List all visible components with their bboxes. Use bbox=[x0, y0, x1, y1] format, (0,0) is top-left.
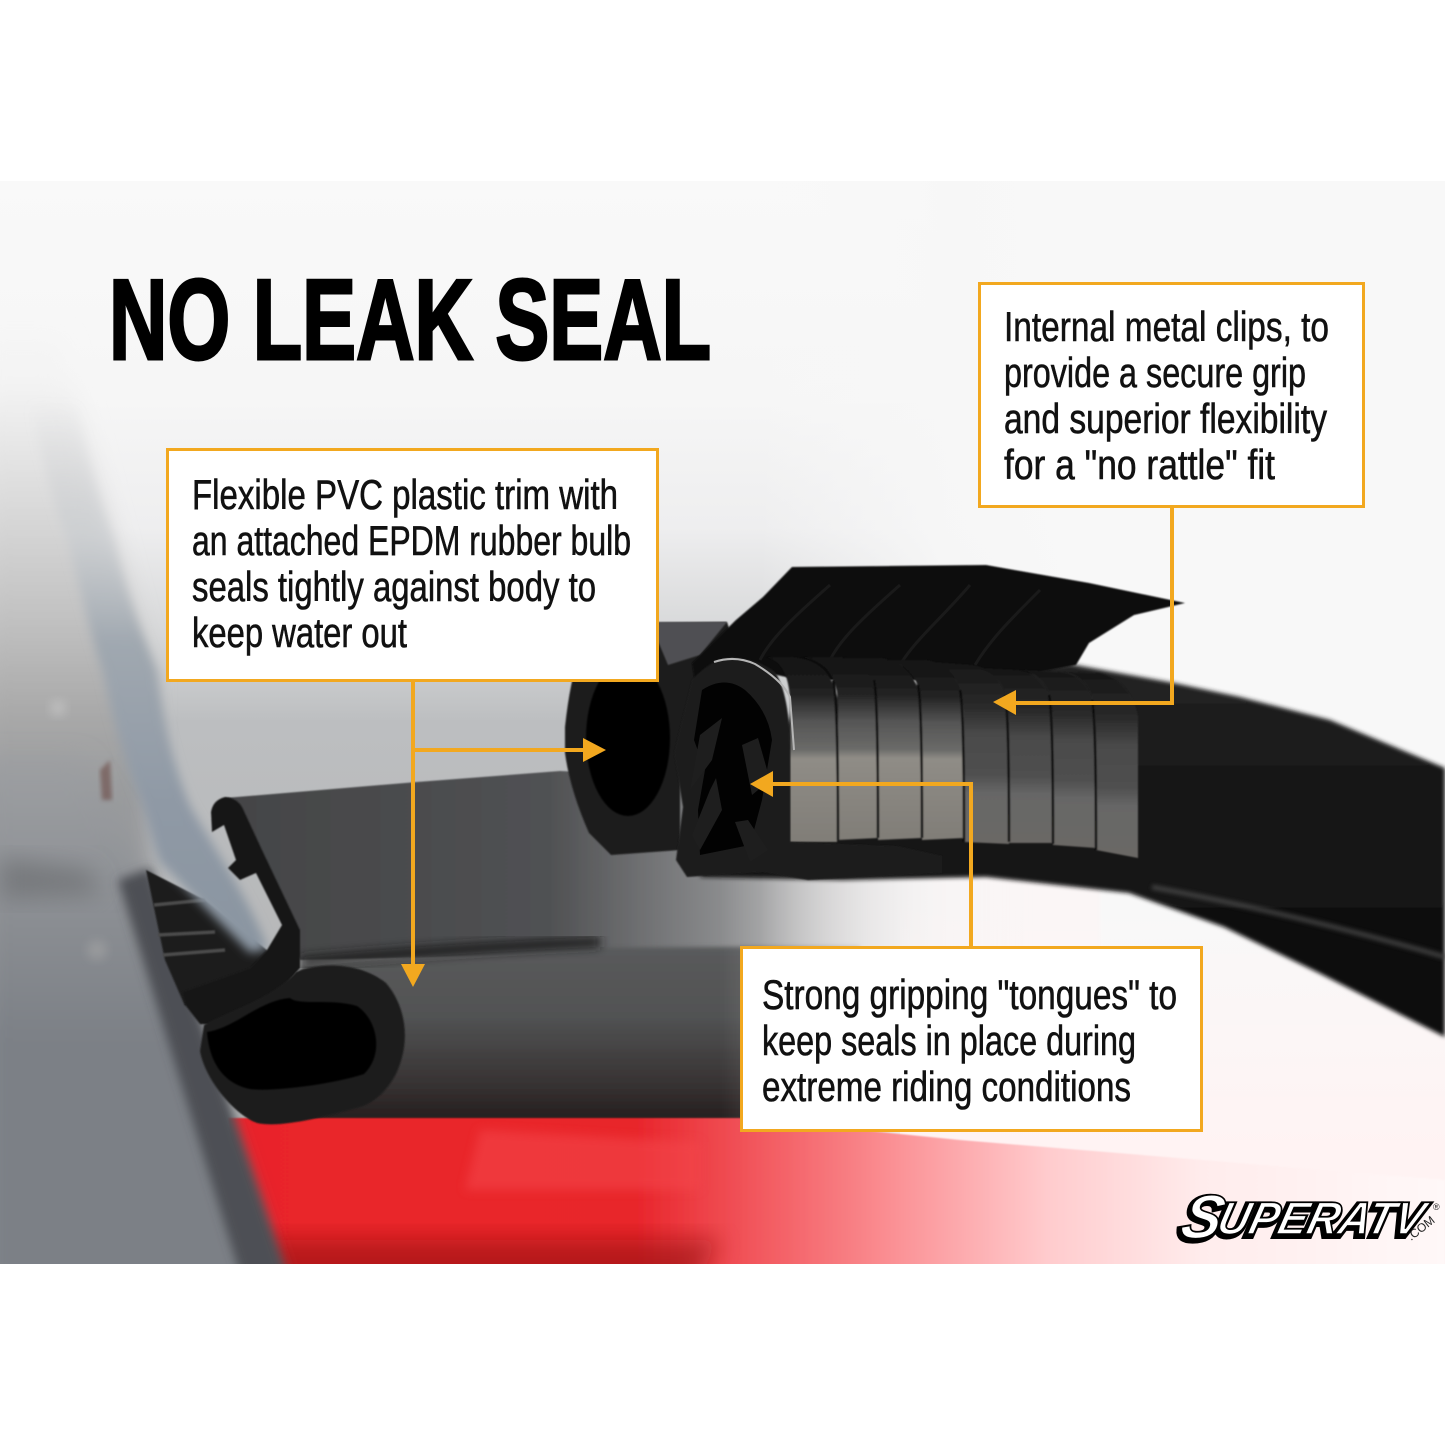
logo: SuperATV bbox=[1173, 1183, 1440, 1254]
title: NO LEAK SEAL bbox=[109, 257, 711, 384]
callout arrow: tongues leader bbox=[750, 771, 971, 947]
callout: metal clips bbox=[980, 284, 1364, 506]
arrow head: clips bbox=[993, 690, 1016, 715]
callout text: provide a secure grip bbox=[1004, 349, 1306, 396]
tube fade to white bbox=[734, 879, 900, 1134]
logo inner: UPERATV bbox=[1213, 1193, 1434, 1244]
pillar dark edge bbox=[118, 868, 292, 1290]
rust mark bbox=[100, 760, 112, 800]
callout text: Strong gripping "tongues" to bbox=[762, 971, 1177, 1018]
clip 2 bbox=[812, 658, 878, 841]
red panel highlight bbox=[465, 1130, 700, 1190]
logo inner: S bbox=[1175, 1183, 1232, 1252]
clip 5 bbox=[939, 663, 1010, 845]
product photo background bbox=[0, 312, 1445, 1264]
arrow head: bulb bbox=[583, 738, 606, 762]
gripper channel body bbox=[674, 657, 942, 880]
callout arrow: metal clips leader bbox=[993, 506, 1172, 715]
trim section on body bbox=[182, 797, 300, 1025]
registered mark: ® bbox=[1433, 1202, 1440, 1212]
tube seam bbox=[300, 942, 600, 962]
red panel bottom shade bbox=[274, 1228, 724, 1264]
logo: SuperATV: UPERATV bbox=[1211, 1195, 1432, 1246]
logo suffix: .COM bbox=[1404, 1213, 1438, 1243]
upper flap bbox=[692, 565, 1185, 690]
flap ribs bbox=[760, 585, 1040, 665]
clip 4 bbox=[885, 660, 964, 840]
bulb hole bbox=[586, 682, 670, 816]
fin highlights bbox=[154, 900, 225, 955]
callout text: an attached EPDM rubber bulb bbox=[192, 517, 631, 564]
red body panel bbox=[228, 1117, 1196, 1264]
blue grey body tongue bbox=[63, 472, 270, 959]
main seal tube at right bbox=[700, 664, 1445, 1037]
grey fins holder bbox=[146, 870, 268, 1006]
logo: SuperATV: S bbox=[1173, 1185, 1230, 1254]
seal lower light line bbox=[1152, 887, 1445, 957]
bulb top highlight bbox=[650, 622, 727, 665]
clip 6 bbox=[986, 669, 1053, 844]
gripping tongues bbox=[690, 718, 770, 862]
infographic canvas bbox=[0, 278, 1445, 1264]
clip 3 bbox=[840, 658, 922, 840]
callout arrow: PVC trim leader bbox=[401, 681, 606, 987]
callout text: keep water out bbox=[192, 609, 407, 656]
callout text: for a "no rattle" fit bbox=[1004, 441, 1275, 488]
trim bulb hole bbox=[207, 998, 376, 1090]
callout text: extreme riding conditions bbox=[762, 1063, 1131, 1110]
clip 1 bbox=[765, 657, 837, 842]
clip 7 bbox=[1028, 671, 1096, 849]
callout text: and superior flexibility bbox=[1004, 395, 1327, 442]
upper left fog bbox=[0, 410, 158, 872]
callout text: Internal metal clips, to bbox=[1004, 303, 1329, 350]
callout text: Flexible PVC plastic trim with bbox=[192, 471, 618, 518]
seal bulb bbox=[565, 622, 740, 855]
callout: gripping tongues bbox=[742, 948, 1202, 1130]
pale pink lower right bbox=[900, 1132, 941, 1137]
clip 8 bbox=[1064, 672, 1138, 858]
callout text: seals tightly against body to bbox=[192, 563, 596, 610]
callout text: keep seals in place during bbox=[762, 1017, 1136, 1064]
trim bulb end bbox=[200, 966, 405, 1124]
callout: PVC trim bbox=[168, 450, 658, 680]
clip gap lines bbox=[833, 680, 1096, 850]
pillar shadow bbox=[0, 858, 100, 900]
back rubber tube bbox=[226, 770, 812, 961]
metal clips bbox=[765, 657, 1138, 858]
gripper cavity bbox=[694, 682, 772, 855]
soft highlight bbox=[88, 942, 106, 959]
clip silver edge bbox=[714, 659, 794, 750]
arrow head: trim bbox=[401, 964, 425, 987]
front rubber tube bbox=[300, 946, 860, 1127]
left pillar bbox=[0, 868, 286, 1264]
soft highlight on pillar bbox=[51, 702, 65, 715]
arrow head: tongues bbox=[750, 771, 773, 797]
right side white fade bbox=[778, 497, 1445, 1134]
